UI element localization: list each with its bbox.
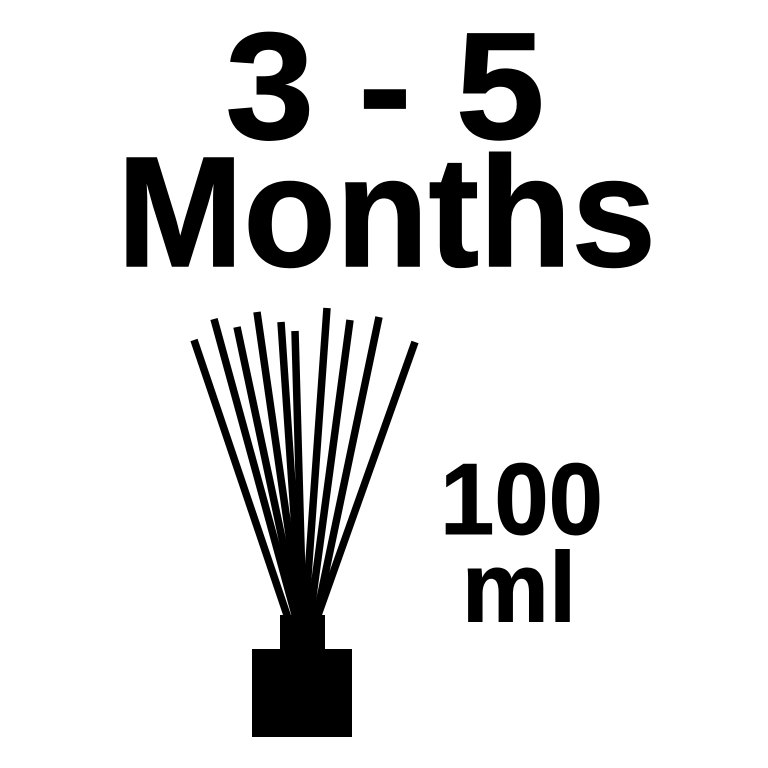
volume unit: ml bbox=[462, 532, 576, 642]
title: months: Months bbox=[117, 125, 656, 300]
bottle neck bbox=[280, 615, 325, 650]
bottle body bbox=[252, 649, 352, 737]
title: duration range: 3 - 5 bbox=[226, 2, 544, 172]
volume number: 100 bbox=[440, 444, 603, 556]
reeds bbox=[194, 308, 415, 618]
icon: reed diffuser bbox=[194, 308, 415, 737]
